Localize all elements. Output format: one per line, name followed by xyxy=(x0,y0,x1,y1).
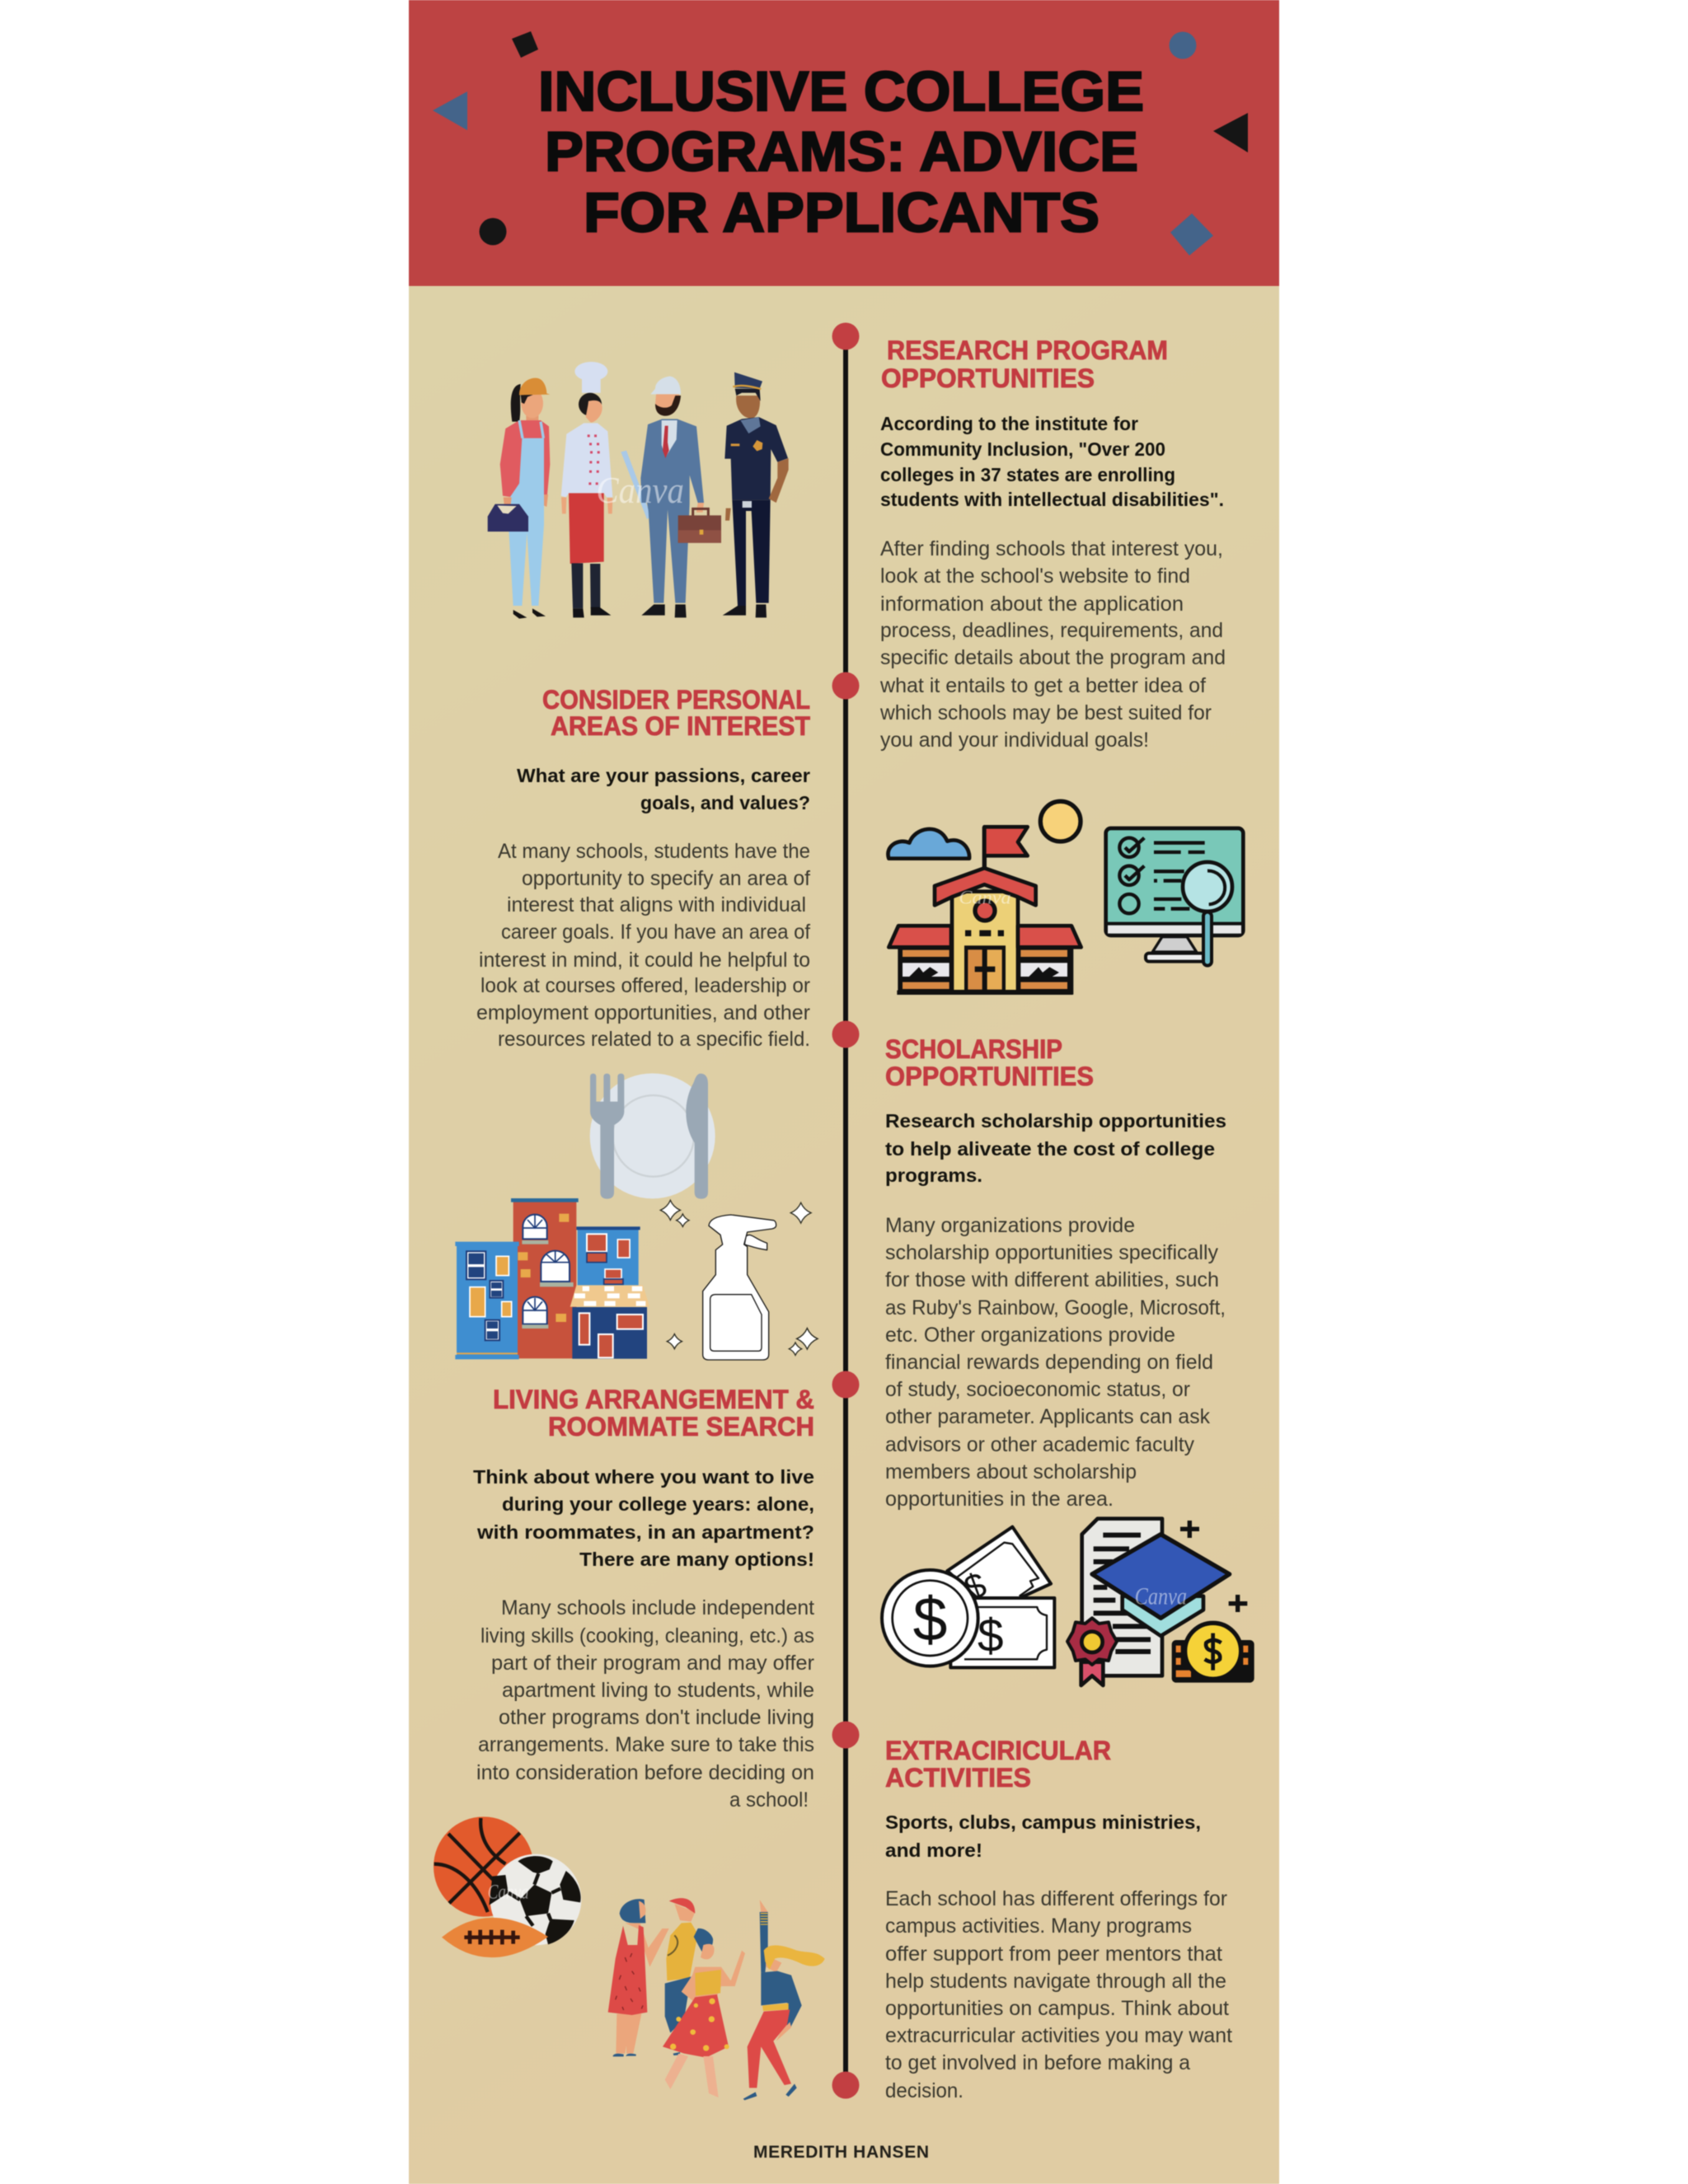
body text: living arrangement: a school! xyxy=(729,1788,809,1811)
body text: scholarships: Many organizations provide xyxy=(885,1214,1135,1237)
worker: police officer xyxy=(723,373,789,617)
decorative shape: blue triangle xyxy=(433,91,467,130)
key point: research program xyxy=(880,413,1224,510)
key point: personal interest xyxy=(517,765,810,813)
illustration: money and scholarship xyxy=(882,1519,1254,1685)
key point: extracurriculars: Sports, clubs, campus ministries, xyxy=(885,1811,1201,1833)
key point: living arrangement: Think about where you want to live xyxy=(473,1466,814,1488)
heading: extracurricular activities xyxy=(885,1736,1111,1793)
body text: scholarships: financial rewards depending on field xyxy=(885,1351,1213,1374)
body text: scholarships: for those with different abilities, such xyxy=(885,1268,1219,1291)
heading: consider personal areas of interest: CONSIDER PERSONAL xyxy=(542,685,810,715)
watermark: Canva xyxy=(959,888,1011,909)
body text: extracurriculars: extracurricular activities you may want xyxy=(885,2024,1232,2047)
body text: personal interest: resources related to a specific field. xyxy=(498,1028,810,1051)
heading: consider personal areas of interest: AREAS OF INTEREST xyxy=(551,711,810,741)
key point: research program: According to the institute for xyxy=(880,413,1138,434)
body text: scholarships: opportunities in the area. xyxy=(885,1488,1114,1511)
body text: research program: what it entails to get a better idea of xyxy=(879,674,1206,697)
body text: research program: process, deadlines, requirements, and xyxy=(880,619,1223,642)
illustration: sports balls and students xyxy=(434,1816,825,2100)
title xyxy=(538,60,1144,244)
heading: living arrangement and roommate search xyxy=(493,1385,814,1441)
key point: scholarships xyxy=(885,1110,1226,1186)
heading: living arrangement and roommate search: ROOMMATE SEARCH xyxy=(548,1412,814,1441)
decorative shape: black diamond xyxy=(512,31,538,58)
heading: research program opportunities: RESEARCH PROGRAM xyxy=(887,335,1168,365)
heading: consider personal areas of interest xyxy=(542,685,810,741)
icon: cash and coin: $ xyxy=(913,1585,947,1654)
heading: living arrangement and roommate search: LIVING ARRANGEMENT & xyxy=(493,1385,814,1414)
body text: extracurriculars xyxy=(885,1887,1232,2102)
body text: research program: After finding schools that interest you, xyxy=(880,537,1223,560)
body text: living arrangement xyxy=(476,1596,814,1811)
body text: scholarships: other parameter. Applicants can ask xyxy=(885,1405,1210,1428)
body text: living arrangement: Many schools include independent xyxy=(501,1596,814,1619)
decorative shape: blue diamond xyxy=(1170,213,1213,255)
key point: living arrangement xyxy=(473,1466,814,1570)
body text: research program xyxy=(879,537,1226,752)
body text: research program: which schools may be best suited for xyxy=(879,701,1212,724)
body text: living arrangement: arrangements. Make sure to take this xyxy=(478,1733,814,1756)
body text: research program: specific details about the program and xyxy=(880,646,1226,669)
key point: personal interest: goals, and values? xyxy=(640,792,810,813)
body text: personal interest: At many schools, students have the xyxy=(498,840,810,863)
title: INCLUSIVE COLLEGE xyxy=(538,60,1144,123)
body text: research program: you and your individual goals! xyxy=(880,729,1149,752)
icon: dancing woman with raised arm xyxy=(743,1900,825,2100)
header banner xyxy=(409,0,1279,286)
key point: scholarships: Research scholarship opportunities xyxy=(885,1110,1226,1132)
icon: woman in polka dot skirt xyxy=(663,1929,745,2097)
key point: extracurriculars: and more! xyxy=(885,1840,982,1861)
icon: sports balls xyxy=(434,1816,581,1957)
body text: research program: look at the school's website to find xyxy=(880,565,1190,588)
body text: scholarships: of study, socioeconomic status, or xyxy=(885,1378,1190,1401)
body text: scholarships: members about scholarship xyxy=(885,1460,1137,1483)
icon: sparkles xyxy=(660,1200,818,1355)
body text: personal interest: career goals. If you have an area of xyxy=(501,921,810,944)
key point: research program: Community Inclusion, "Over 200 xyxy=(880,438,1165,460)
heading: scholarship opportunities: SCHOLARSHIP xyxy=(885,1034,1062,1064)
icon: cash and coin: $ xyxy=(959,1565,992,1610)
heading: extracurricular activities: EXTRACIRICULAR xyxy=(885,1736,1111,1765)
heading: research program opportunities: OPPORTUNITIES xyxy=(881,363,1095,393)
decorative shape: black circle xyxy=(480,218,506,246)
body text: personal interest: interest that aligns with individual xyxy=(507,893,806,916)
heading: scholarship opportunities xyxy=(885,1034,1094,1091)
decorative shape: blue circle xyxy=(1169,31,1197,59)
key point: research program: students with intellectual disabilities". xyxy=(880,489,1224,510)
footer author credit: MEREDITH HANSEN xyxy=(753,2143,929,2162)
key point: scholarships: to help aliveate the cost of college xyxy=(885,1138,1215,1160)
icon: woman in red dress xyxy=(608,1899,669,2056)
illustration: plate, buildings and spray bottle xyxy=(455,1073,818,1360)
body text: personal interest: look at courses offered, leadership or xyxy=(481,974,810,997)
body text: living arrangement: part of their program and may offer xyxy=(491,1652,814,1675)
watermark: Canva xyxy=(488,1881,529,1903)
body text: scholarships xyxy=(885,1214,1226,1511)
body text: extracurriculars: Each school has different offerings for xyxy=(885,1887,1227,1910)
title: PROGRAMS: ADVICE xyxy=(545,120,1138,183)
body text: living arrangement: living skills (cooking, cleaning, etc.) as xyxy=(481,1624,814,1647)
body text: living arrangement: other programs don't include living xyxy=(499,1706,814,1729)
body text: research program: information about the application xyxy=(880,593,1184,616)
body text: personal interest: opportunity to specify an area of xyxy=(522,867,810,890)
body text: scholarships: advisors or other academic faculty xyxy=(885,1433,1194,1456)
body text: personal interest: interest in mind, it could he helpful to xyxy=(479,949,810,972)
body text: extracurriculars: to get involved in before making a xyxy=(885,2051,1190,2074)
key point: scholarships: programs. xyxy=(885,1165,982,1186)
watermark: Canva xyxy=(596,470,684,511)
key point: living arrangement: There are many options! xyxy=(579,1549,814,1570)
icon: checklist monitor xyxy=(1106,828,1243,966)
icon: colorful buildings xyxy=(455,1198,649,1359)
body text: extracurriculars: decision. xyxy=(885,2079,964,2102)
icon: man in yellow jacket xyxy=(665,1898,698,2055)
decorative shape: black triangle xyxy=(1213,113,1248,152)
icon: cash and coin xyxy=(882,1527,1054,1667)
body text: extracurriculars: opportunities on campus. Think about xyxy=(885,1997,1229,2020)
key point: extracurriculars xyxy=(885,1811,1201,1861)
body text: personal interest: employment opportunities, and other xyxy=(476,1001,810,1024)
heading: extracurricular activities: ACTIVITIES xyxy=(885,1763,1031,1793)
watermark: Canva xyxy=(1135,1583,1187,1610)
illustration: school and checklist monitor xyxy=(888,801,1243,995)
body text: scholarships: scholarship opportunities specifically xyxy=(885,1241,1218,1264)
icon: plate with fork and knife xyxy=(590,1073,715,1199)
key point: living arrangement: during your college years: alone, xyxy=(502,1493,814,1515)
body text: extracurriculars: offer support from peer mentors that xyxy=(885,1943,1222,1966)
worker: engineer in suit xyxy=(621,377,721,617)
icon: school building xyxy=(888,801,1081,995)
body text: extracurriculars: help students navigate through all the xyxy=(885,1970,1226,1993)
page background panel xyxy=(409,0,1279,2184)
key point: living arrangement: with roommates, in an apartment? xyxy=(476,1521,814,1543)
icon: spray bottle xyxy=(703,1215,776,1360)
icon: diploma, cap, ribbon and coin xyxy=(1067,1519,1254,1685)
illustration: four workers xyxy=(488,362,789,619)
heading: scholarship opportunities: OPPORTUNITIES xyxy=(885,1062,1094,1091)
body text: extracurriculars: campus activities. Many programs xyxy=(885,1915,1192,1938)
timeline xyxy=(832,323,859,2098)
title: FOR APPLICANTS xyxy=(584,181,1100,244)
key point: personal interest: What are your passions, career xyxy=(517,765,810,786)
body text: scholarships: etc. Other organizations provide xyxy=(885,1324,1175,1347)
body text: scholarships: as Ruby's Rainbow, Google, Microsoft, xyxy=(885,1296,1226,1319)
worker: chef xyxy=(561,362,612,617)
icon: cash and coin: $ xyxy=(978,1610,1004,1662)
body text: living arrangement: into consideration before deciding on xyxy=(476,1761,814,1784)
body text: personal interest xyxy=(476,840,810,1051)
heading: research program opportunities xyxy=(881,335,1168,393)
worker: overalls woman xyxy=(488,378,550,619)
body text: living arrangement: apartment living to students, while xyxy=(502,1679,814,1702)
key point: research program: colleges in 37 states are enrolling xyxy=(880,464,1175,485)
